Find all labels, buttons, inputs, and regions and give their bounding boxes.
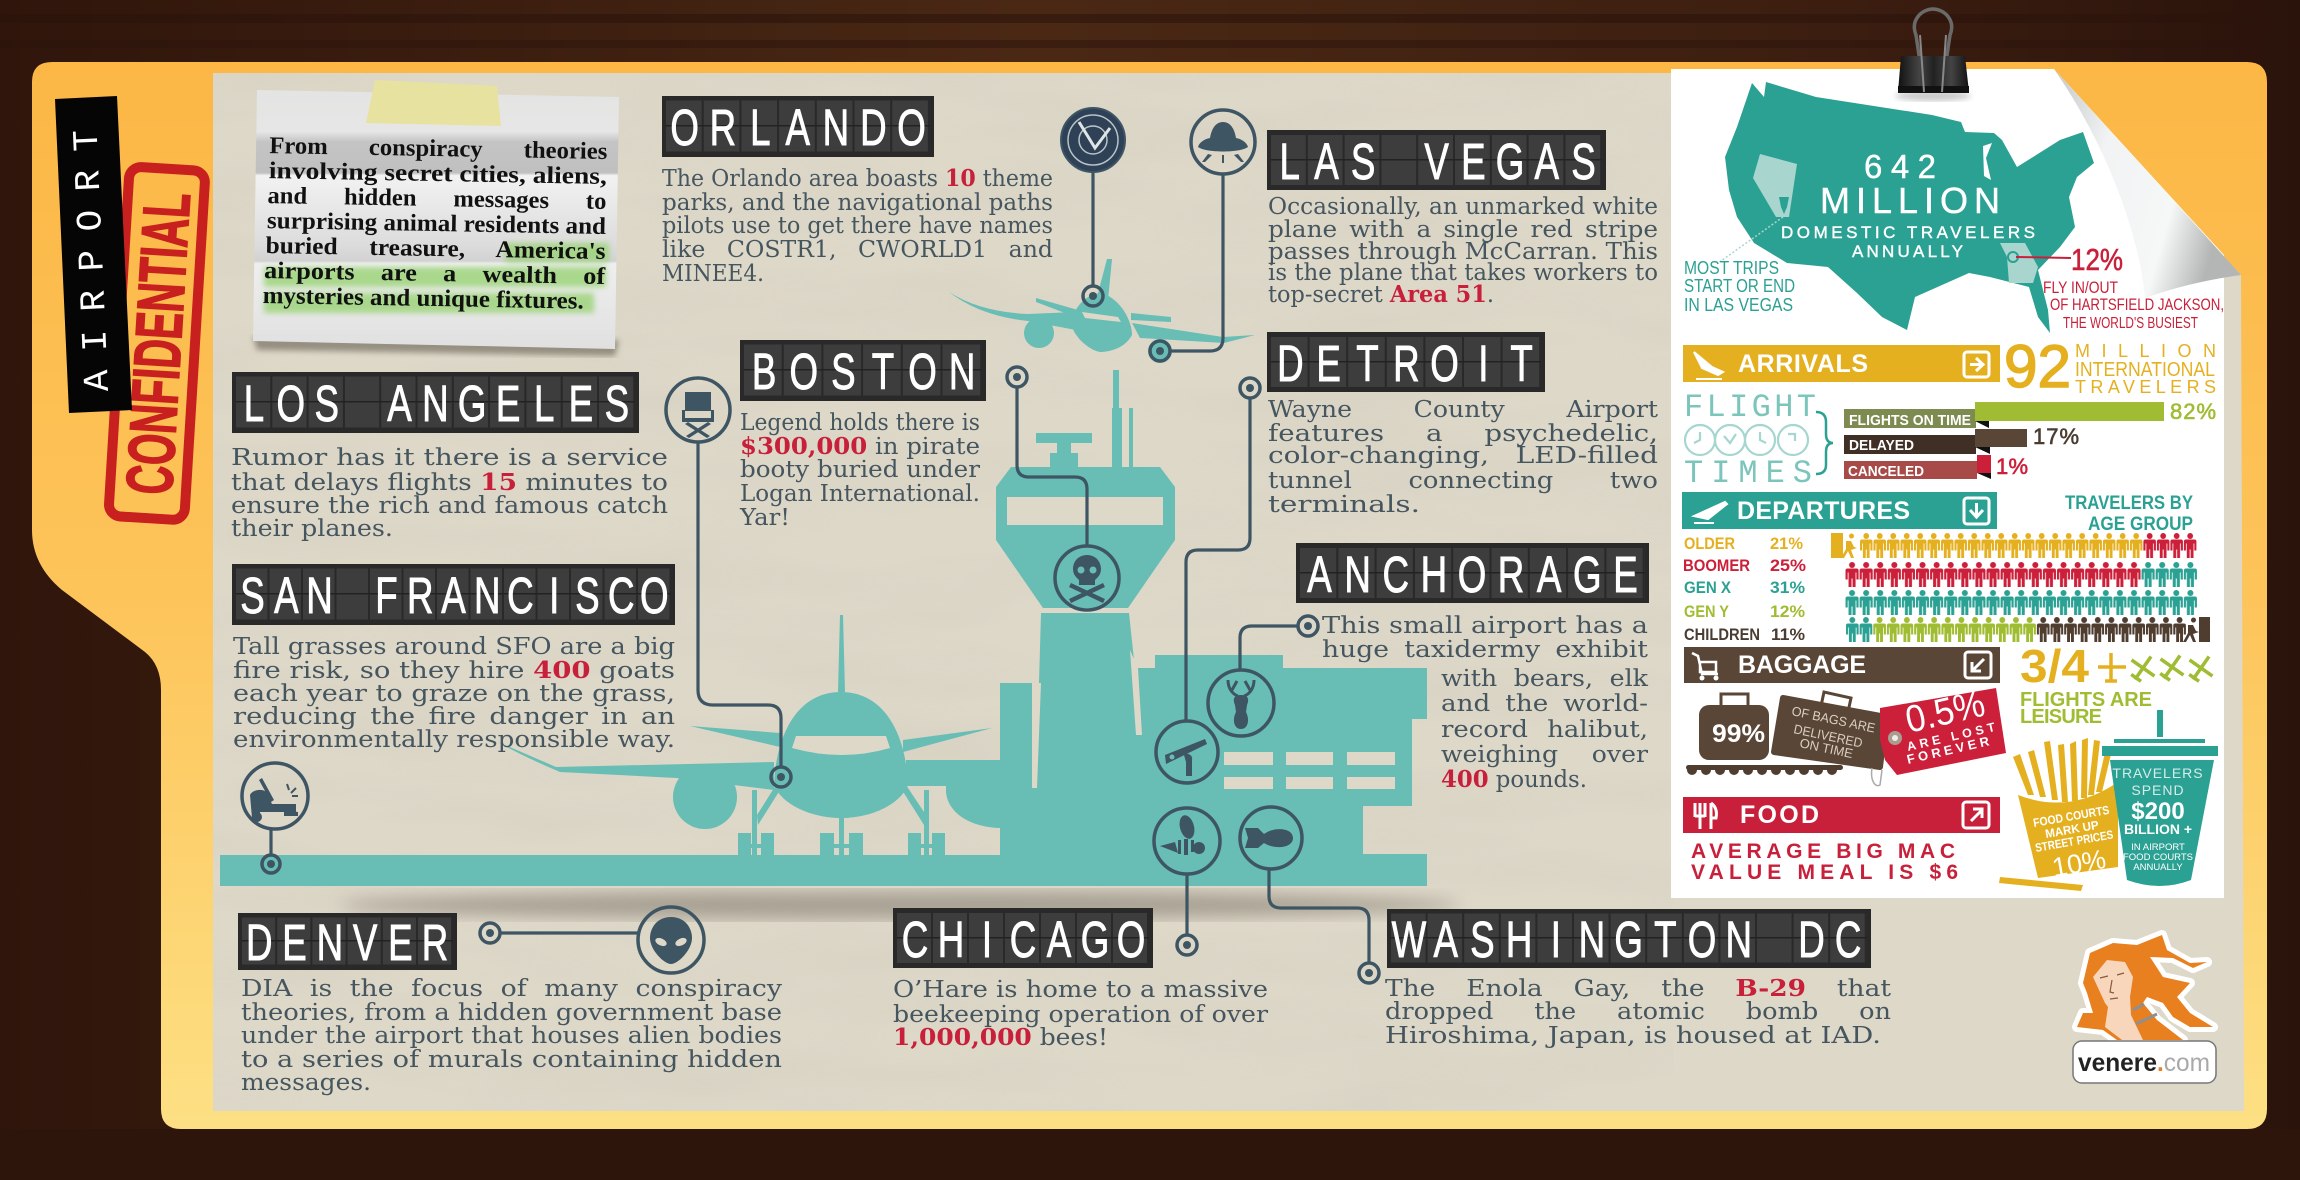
text: orlando: The Orlando area boasts 10 theme xyxy=(662,164,1053,192)
stat: 3/4 flights are leisure: 3/4 xyxy=(2020,640,2089,692)
text: orlando: pilots use to get there have names xyxy=(662,211,1053,239)
atlanta note: 12% xyxy=(2071,242,2123,277)
text: chicago xyxy=(893,975,1269,1051)
heading: boston: BOSTON xyxy=(752,344,975,400)
binder clip xyxy=(1895,9,1971,101)
legend: age groups: 11% xyxy=(1771,626,1805,644)
icon: deer anchorage xyxy=(1208,616,1318,736)
fries box: FOOD COURTS xyxy=(2032,803,2110,830)
las vegas pin xyxy=(1779,197,1789,214)
text: detroit: color-changing, LED-filled xyxy=(1268,441,1658,469)
intro text: involving secret cities, aliens, xyxy=(269,158,607,190)
label: airport xyxy=(55,96,132,413)
text: boston: Yar! xyxy=(739,503,790,531)
text: detroit: features a psychedelic, xyxy=(1268,419,1658,447)
text: detroit xyxy=(1268,395,1659,518)
bar chart: flight status: 82% xyxy=(2170,399,2216,424)
legend: age groups: 12% xyxy=(1770,603,1805,621)
control tower xyxy=(996,370,1175,886)
text: los angeles xyxy=(231,443,668,542)
icon: camera detroit xyxy=(1156,378,1260,783)
text: boston xyxy=(739,408,981,531)
icon: bomb washington xyxy=(1240,807,1379,983)
text: san francisco: reducing the fire danger in an xyxy=(233,702,675,730)
state: georgia xyxy=(2000,243,2038,283)
label: airport: AIRPORT xyxy=(67,129,119,392)
map headline: MILLION xyxy=(1820,180,2000,221)
clocks xyxy=(1685,425,1808,455)
heading: travelers by age group xyxy=(2065,493,2193,535)
text: anchorage: and the world- xyxy=(1441,689,1648,717)
intro text: surprising animal residents and xyxy=(267,208,607,240)
text: denver: under the airport that houses alien bodies xyxy=(241,1021,782,1049)
ground strip xyxy=(220,855,1427,886)
fries box: MARK UP xyxy=(2044,818,2100,841)
bar chart: flight status: 1% xyxy=(1996,454,2028,479)
atlanta note: FLY IN/OUT xyxy=(2043,278,2118,297)
section bar: arrivals: ARRIVALS xyxy=(1738,350,1868,378)
face and shoulders xyxy=(2093,960,2143,1040)
stamp: confidential xyxy=(108,166,206,520)
text: san francisco: Tall grasses around SFO are a big xyxy=(233,632,675,660)
icon: ufo las vegas xyxy=(1150,110,1255,361)
heading: orlando: ORLANDO xyxy=(670,100,926,156)
flight times: TIMES xyxy=(1684,455,1812,492)
luggage tag: 0.5% lost: 0.5% xyxy=(1902,683,1989,742)
suitcase: of bags delivered: OF BAGS ARE xyxy=(1790,703,1877,736)
map headline xyxy=(1781,148,2035,261)
stat: 3/4 flights are leisure xyxy=(2020,640,2220,728)
big plane xyxy=(498,615,1002,855)
text: los angeles: that delays flights 15 minutes to xyxy=(231,468,668,496)
text: anchorage: weighing over xyxy=(1441,740,1649,768)
food stat: big mac: AVERAGE BIG MAC xyxy=(1691,840,1955,863)
fries box xyxy=(1999,738,2118,891)
suitcase: 99%: 99% xyxy=(1712,720,1765,748)
text: denver: DIA is the focus of many conspiracy xyxy=(241,974,783,1002)
text: washington dc: The Enola Gay, the B-29 that xyxy=(1385,974,1892,1002)
heading: san francisco: SAN FRANCISCO xyxy=(240,568,669,624)
heading: travelers by age group: AGE GROUP xyxy=(2088,514,2193,535)
heading: travelers by age group: TRAVELERS BY xyxy=(2065,493,2193,514)
food stat: big mac xyxy=(1691,840,1958,884)
logo: venere.com: venere.com xyxy=(2078,1049,2210,1077)
stat: 92 million international travelers: 92 xyxy=(2004,333,2071,400)
fries box: STREET PRICES xyxy=(2034,827,2114,855)
heading: anchorage: ANCHORAGE xyxy=(1307,547,1638,603)
stamp: confidential: CONFIDENTIAL xyxy=(112,191,204,496)
text: detroit: tunnel connecting two xyxy=(1268,466,1658,494)
heading: chicago: CHICAGO xyxy=(902,912,1145,968)
luggage tag: 0.5% lost: ARE LOST xyxy=(1906,720,1997,754)
stat: 92 million international travelers: INTERNATIONAL xyxy=(2075,359,2215,381)
flying plane xyxy=(949,259,1255,363)
stat: 3/4 flights are leisure: FLIGHTS ARE xyxy=(2020,689,2152,711)
luggage tag: 0.5% lost xyxy=(1872,683,2006,786)
legend: age groups: 25% xyxy=(1770,557,1806,575)
icon: skull boston xyxy=(1007,367,1119,610)
section bar: food: FOOD xyxy=(1740,801,1819,829)
heading: denver: DENVER xyxy=(246,915,448,971)
text: los angeles: their planes. xyxy=(231,514,393,542)
text: las vegas: plane with a single red stripe xyxy=(1268,215,1658,243)
stat: 3/4 flights are leisure: LEISURE xyxy=(2020,706,2102,728)
map headline: 642 xyxy=(1864,148,1936,185)
intro text: buried treasure, America's xyxy=(265,233,606,265)
text: boston: Logan International. xyxy=(740,479,980,507)
text: orlando: MINEE4. xyxy=(662,259,764,287)
text: detroit: Wayne County Airport xyxy=(1268,395,1659,423)
text: denver xyxy=(241,974,783,1096)
text: orlando: like COSTR1, CWORLD1 and xyxy=(662,235,1053,263)
text: anchorage: This small airport has a xyxy=(1322,611,1648,639)
text: anchorage xyxy=(1322,611,1649,793)
fries box: 10% xyxy=(2050,844,2108,883)
text: san francisco: environmentally responsible way. xyxy=(233,725,675,753)
section bar: baggage: BAGGAGE xyxy=(1738,651,1866,679)
stat: 92 million international travelers: TRAVELERS xyxy=(2075,377,2216,397)
terminal building xyxy=(1032,650,1427,886)
drink cup: IN AIRPORT xyxy=(2131,842,2185,853)
intro text: airports are a wealth of xyxy=(264,258,606,290)
atlanta note: THE WORLD'S BUSIEST xyxy=(2063,315,2198,332)
intro text: and hidden messages to xyxy=(267,183,607,215)
text: las vegas: passes through McCarran. This xyxy=(1268,237,1658,265)
text: san francisco: fire risk, so they hire 400 goats xyxy=(233,656,675,684)
legend: age groups: 21% xyxy=(1770,535,1803,553)
stat: 92 million international travelers: MILLION xyxy=(2075,341,2216,361)
text: chicago: beekeeping operation of over xyxy=(893,1000,1269,1028)
text: san francisco: each year to graze on the grass, xyxy=(233,679,675,707)
suitcase: of bags delivered xyxy=(1774,692,1886,767)
icon: radar orlando xyxy=(1061,108,1125,306)
text: orlando xyxy=(662,164,1053,287)
text: anchorage: record halibut, xyxy=(1441,715,1648,743)
drink cup: FOOD COURTS xyxy=(2123,852,2193,863)
legend: age groups: GEN Y xyxy=(1684,603,1729,621)
intro note xyxy=(253,80,619,356)
text: san francisco xyxy=(233,632,675,753)
section bar: arrivals xyxy=(1683,345,2000,382)
airport illustration xyxy=(220,259,1427,886)
legend: age groups xyxy=(1683,535,1806,644)
drink cup: BILLION + xyxy=(2124,821,2192,837)
food stat: big mac: VALUE MEAL IS $6 xyxy=(1691,861,1958,884)
las vegas note: START OR END xyxy=(1684,276,1795,296)
text: detroit: terminals. xyxy=(1268,490,1420,518)
drink cup: TRAVELERS xyxy=(2112,765,2204,781)
text: las vegas xyxy=(1268,192,1658,308)
text: washington dc: dropped the atomic bomb on xyxy=(1385,997,1891,1025)
icon: director chair los angeles xyxy=(666,378,791,787)
flight times xyxy=(1684,389,1833,492)
logo: venere.com xyxy=(2073,935,2216,1083)
text: denver: theories, from a hidden government base xyxy=(241,998,782,1026)
text: las vegas: is the plane that takes workers to xyxy=(1268,258,1658,286)
page curl xyxy=(2054,69,2241,298)
text: las vegas: Occasionally, an unmarked white xyxy=(1268,192,1658,220)
text: chicago: O’Hare is home to a massive xyxy=(893,975,1268,1003)
bar chart: flight status: DELAYED xyxy=(1849,437,1914,454)
crumpled paper sheet xyxy=(213,73,2244,1111)
map headline: ANNUALLY xyxy=(1852,242,1963,261)
heading: washington dc: WASHINGTON DC xyxy=(1392,912,1861,968)
icon: mower san francisco runway xyxy=(242,763,308,873)
white stats panel xyxy=(1671,69,2224,898)
conveyor belt xyxy=(1686,765,1843,775)
intro text: mysteries and unique fixtures. xyxy=(263,283,584,315)
legend: age groups: 31% xyxy=(1770,579,1805,597)
drink cup xyxy=(2102,710,2218,886)
text: los angeles: ensure the rich and famous catch xyxy=(231,491,668,519)
drink cup: $200 xyxy=(2131,798,2185,825)
section bar: baggage xyxy=(1684,647,2000,683)
las vegas note xyxy=(1684,258,1795,315)
flight times: FLIGHT xyxy=(1684,389,1816,426)
text: chicago: 1,000,000 bees! xyxy=(893,1023,1108,1051)
text: denver: messages. xyxy=(241,1068,371,1096)
las vegas note: MOST TRIPS xyxy=(1684,258,1779,278)
atlanta marker xyxy=(2008,252,2018,262)
section bar: departures: DEPARTURES xyxy=(1737,497,1910,525)
icon: bee chicago xyxy=(1154,808,1220,955)
legend: age groups: OLDER xyxy=(1684,535,1735,553)
suitcase: of bags delivered: ON TIME xyxy=(1798,735,1855,761)
heading: las vegas: LAS VEGAS xyxy=(1280,134,1596,190)
text: orlando: parks, and the navigational paths xyxy=(662,188,1053,216)
text: washington dc: Hiroshima, Japan, is housed at IAD. xyxy=(1385,1021,1881,1049)
intro highlights xyxy=(264,243,609,313)
luggage tag: 0.5% lost: FOREVER xyxy=(1905,733,1991,767)
hair xyxy=(2077,935,2213,1040)
intro text xyxy=(263,133,609,315)
text: los angeles: Rumor has it there is a service xyxy=(231,443,668,471)
state: nevada xyxy=(1753,154,1797,217)
drink cup: SPEND xyxy=(2131,782,2185,798)
intro text: From conspiracy theories xyxy=(269,133,608,165)
suitcase: of bags delivered: DELIVERED xyxy=(1792,721,1864,750)
bar chart: flight status: CANCELED xyxy=(1848,463,1924,480)
map of united states xyxy=(1684,82,2224,333)
legend: age groups: BOOMER xyxy=(1683,557,1750,575)
pictogram: travelers by age xyxy=(1831,533,2210,642)
text: las vegas: top-secret Area 51. xyxy=(1268,280,1494,308)
bar chart: flight status: 17% xyxy=(2033,424,2079,449)
text: anchorage: 400 pounds. xyxy=(1441,765,1587,793)
drink cup: ANNUALLY xyxy=(2133,862,2183,873)
text: anchorage: with bears, elk xyxy=(1441,664,1649,692)
legend: age groups: GEN X xyxy=(1684,579,1731,597)
text: denver: to a series of murals containing hidden xyxy=(241,1045,782,1073)
section bar: departures xyxy=(1682,492,1997,529)
heading: detroit: DETROIT xyxy=(1277,336,1533,392)
las vegas note: IN LAS VEGAS xyxy=(1684,295,1793,315)
text: anchorage: huge taxidermy exhibit xyxy=(1322,635,1649,663)
text: boston: $300,000 in pirate xyxy=(740,432,980,460)
icon: alien denver xyxy=(480,907,704,973)
text: boston: booty buried under xyxy=(740,455,981,483)
bar chart: flight status: FLIGHTS ON TIME xyxy=(1849,412,1971,429)
heading: los angeles: LOS ANGELES xyxy=(244,376,629,432)
atlanta note xyxy=(2043,242,2224,332)
atlanta note: OF HARTSFIELD JACKSON, xyxy=(2050,295,2224,314)
map headline: DOMESTIC TRAVELERS xyxy=(1781,223,2035,242)
text: boston: Legend holds there is xyxy=(740,408,980,436)
suitcase: 99% xyxy=(1699,694,1769,760)
legend: age groups: CHILDREN xyxy=(1684,626,1760,644)
text: washington dc xyxy=(1385,974,1892,1049)
section bar: food xyxy=(1683,797,2000,833)
baggage suitcases xyxy=(1686,683,2006,786)
stat: 92 million international travelers xyxy=(2004,333,2216,400)
bar chart: flight status xyxy=(1844,399,2216,480)
